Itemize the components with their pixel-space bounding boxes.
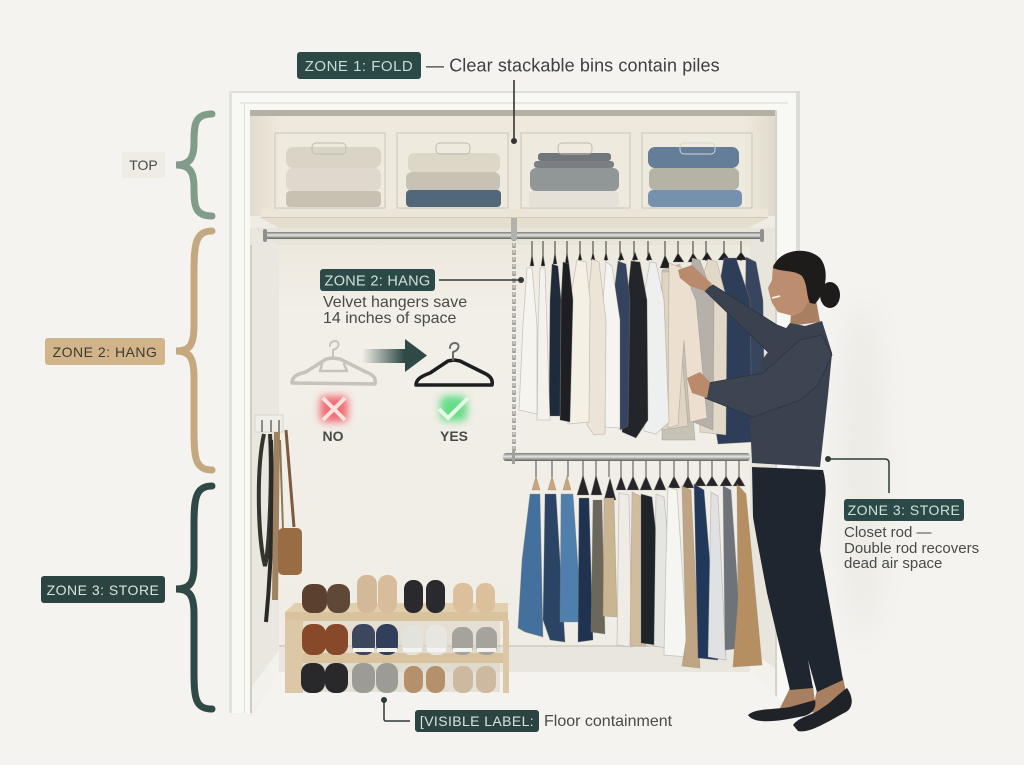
white shirt — [603, 262, 620, 428]
callout: floor containment — [381, 697, 673, 732]
label: top: TOP — [129, 157, 158, 173]
neck — [790, 300, 820, 326]
callout: zone 3 store: Double rod recovers — [844, 540, 979, 557]
ankles — [778, 686, 815, 712]
hair — [773, 251, 826, 304]
label: top — [122, 152, 165, 178]
upper arm — [704, 285, 790, 352]
shoe rack with shoes — [285, 575, 509, 693]
beige shirt — [587, 259, 606, 435]
navy dress — [549, 264, 561, 416]
middle row shoes — [302, 624, 326, 655]
baseboard — [279, 645, 750, 672]
rack — [285, 603, 509, 693]
icon: green yes check — [439, 396, 468, 421]
bracket: top — [176, 114, 212, 216]
navy shirt — [613, 261, 630, 430]
callout: zone 3 store: ZONE 3: STORE — [848, 502, 960, 518]
callout: zone 1 fold: — Clear stackable bins contain piles — [426, 56, 720, 76]
callout: zone 3 store: dead air space — [844, 555, 942, 572]
black shirt — [622, 261, 648, 438]
callout: floor containment: Floor containment — [544, 713, 673, 730]
label: zone 3 store: ZONE 3: STORE — [47, 582, 159, 598]
callout: zone 3 store — [825, 456, 979, 572]
comparison: velvet hanger — [416, 343, 492, 385]
cream jacket — [696, 259, 727, 435]
icon: red no cross — [320, 396, 348, 422]
label: zone 3 store — [41, 576, 165, 603]
belts and bag on wall hooks — [255, 415, 302, 622]
floor — [252, 672, 787, 765]
callout: zone 1 fold — [297, 52, 720, 144]
beige back piece — [662, 264, 695, 440]
comparison: wrong hanger — [292, 341, 375, 384]
white tanks — [537, 268, 550, 420]
top shelf — [261, 209, 768, 228]
bin 2 — [397, 133, 508, 208]
hand upper — [678, 265, 712, 291]
lower hung clothes — [518, 461, 762, 668]
bin 4 — [642, 133, 752, 208]
black dress — [560, 262, 573, 422]
label: yes: YES — [440, 428, 468, 444]
arrow: no to yes — [362, 339, 427, 372]
beige front jacket — [668, 263, 707, 428]
callout: zone 2 hang — [320, 269, 524, 327]
woman figure — [678, 251, 886, 731]
hanging chain — [511, 218, 517, 456]
white shirt — [643, 262, 669, 434]
top row shoes — [302, 584, 327, 613]
upper hung clothes — [519, 241, 765, 444]
face — [768, 255, 812, 316]
navy jacket back — [743, 257, 765, 432]
left side wall — [252, 228, 279, 712]
grey shirt — [688, 258, 714, 430]
cream shirt — [568, 260, 590, 424]
bracket: zone 3 — [176, 486, 212, 709]
label: zone 2 hang: ZONE 2: HANG — [53, 344, 157, 360]
bin 3 — [521, 133, 630, 208]
lower arm — [705, 335, 832, 417]
right side wall — [750, 228, 778, 700]
sweater body — [750, 321, 832, 467]
closet frame and interior — [229, 91, 800, 765]
upper closet rod — [263, 229, 764, 242]
callout: zone 2 hang: ZONE 2: HANG — [325, 274, 430, 290]
bracket: zone 2 — [176, 231, 212, 470]
trousers — [752, 467, 843, 692]
hand lower — [687, 372, 710, 398]
callout: zone 2 hang: 14 inches of space — [323, 310, 457, 327]
shoes — [748, 700, 815, 721]
label: zone 2 hang — [45, 338, 165, 365]
right jamb — [775, 110, 800, 706]
callout: floor containment: [VISIBLE LABEL: — [420, 713, 534, 729]
wall shadow — [838, 300, 886, 640]
zone brackets — [176, 114, 212, 709]
bottom row shoes — [301, 663, 325, 693]
shirts — [617, 493, 632, 647]
hair bun — [820, 282, 840, 308]
zone 1 bins with folded clothes — [275, 133, 752, 208]
callout: zone 2 hang: Velvet hangers save — [323, 294, 467, 311]
lower closet rod — [503, 451, 750, 464]
callout: zone 1 fold: ZONE 1: FOLD — [305, 58, 413, 75]
bin 1 — [275, 133, 385, 208]
callout: zone 3 store: Closet rod — — [844, 524, 932, 541]
jeans — [518, 494, 543, 637]
label: no: NO — [322, 428, 344, 444]
